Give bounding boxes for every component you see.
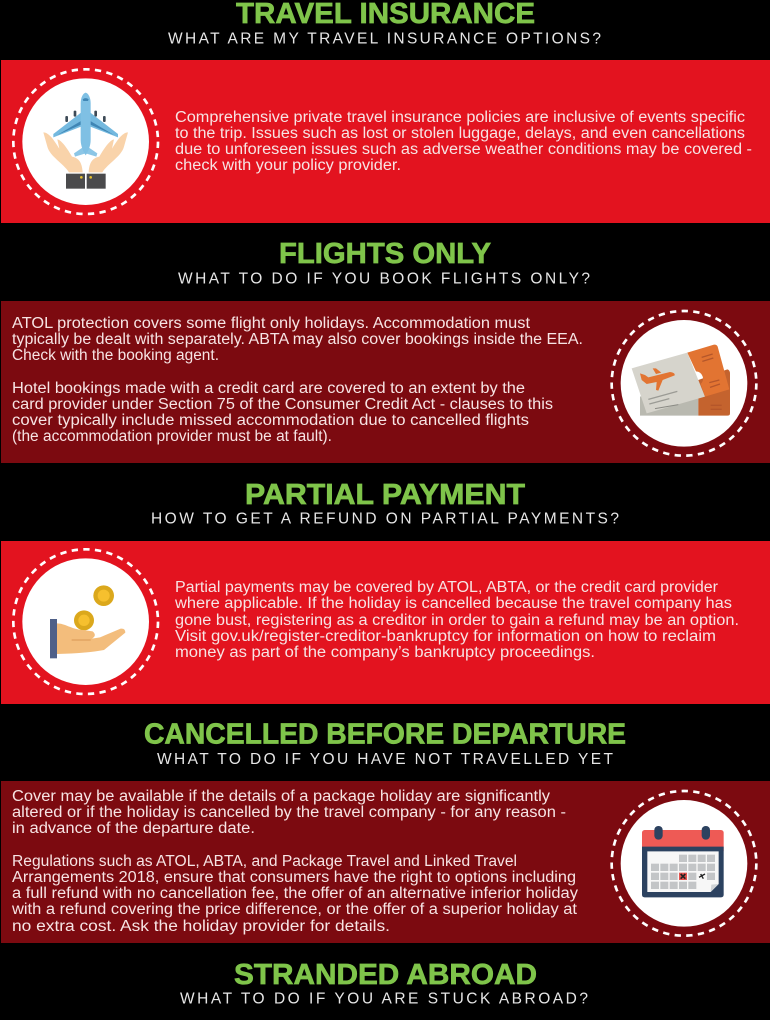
text: travel insurance body: to the trip. Issues such as lost or stolen luggage, delays, and even cancellations: [175, 125, 745, 142]
text: partial payment body: Partial payments may be covered by ATOL, ABTA, or the credit card provider: [175, 579, 718, 596]
text: cancelled before departure body: with a refund covering the price difference, or the offer of a superior holiday at: [11, 901, 578, 918]
text: cancelled before departure body: Cover may be available if the details of a package holiday are significantly: [12, 788, 550, 805]
text: cancelled before departure body: a full refund with no cancellation fee, the offer of an alternative inferior holiday: [12, 885, 578, 902]
text: flights only body: [12, 315, 583, 445]
text: partial payment body: gone bust, registering as a creditor in order to gain a refund may be an option.: [175, 612, 739, 629]
heading: flights only: [178, 238, 590, 288]
text: cancelled before departure body: in advance of the departure date.: [12, 820, 255, 837]
panel: partial payment: [1, 541, 770, 704]
text: travel insurance body: check with your policy provider.: [175, 157, 401, 174]
text: cancelled before departure body: altered or if the holiday is cancelled by the travel company - for any reason -: [12, 804, 566, 821]
panel: cancelled before departure: [1, 781, 770, 943]
heading: stranded abroad: WHAT TO DO IF YOU ARE STUCK ABROAD?: [180, 990, 588, 1008]
heading: partial payment: [151, 479, 619, 528]
text: flights only body: cover typically include missed accommodation due to cancelled flights: [12, 412, 529, 429]
text: cancelled before departure body: no extra cost. Ask the holiday provider for details.: [12, 918, 390, 935]
text: travel insurance body: [175, 109, 752, 174]
text: partial payment body: money as part of the company’s bankruptcy proceedings.: [175, 644, 595, 661]
heading: flights only: WHAT TO DO IF YOU BOOK FLIGHTS ONLY?: [178, 270, 590, 288]
heading: cancelled before departure: WHAT TO DO IF YOU HAVE NOT TRAVELLED YET: [157, 751, 614, 768]
text: partial payment body: [174, 579, 739, 661]
heading: travel insurance: WHAT ARE MY TRAVEL INSURANCE OPTIONS?: [168, 30, 601, 48]
text: partial payment body: where applicable. If the holiday is cancelled because the travel company has: [174, 595, 732, 612]
text: flights only body: ATOL protection covers some flight only holidays. Accommodation must: [12, 315, 531, 332]
panel: flights only: [1, 301, 770, 463]
icon: plane tickets: [612, 311, 756, 456]
text: flights only body: typically be dealt with separately. ABTA may also cover bookings inside the EEA.: [12, 331, 583, 348]
heading: stranded abroad: STRANDED ABROAD: [234, 959, 537, 991]
icon: plane held in hands: [13, 69, 158, 214]
text: flights only body: Hotel bookings made with a credit card are covered to an extent by the: [12, 380, 525, 397]
text: cancelled before departure body: [11, 788, 578, 935]
text: flights only body: card provider under Section 75 of the Consumer Credit Act - clauses to this: [12, 396, 553, 413]
heading: cancelled before departure: CANCELLED BEFORE DEPARTURE: [144, 718, 626, 750]
text: partial payment body: Visit gov.uk/register-creditor-bankruptcy for information on how to reclaim: [175, 628, 716, 645]
heading: cancelled before departure: [144, 718, 626, 768]
heading: travel insurance: [168, 0, 601, 48]
heading: partial payment: HOW TO GET A REFUND ON PARTIAL PAYMENTS?: [151, 510, 619, 528]
text: cancelled before departure body: Regulations such as ATOL, ABTA, and Package Travel and Linked Travel: [12, 853, 517, 870]
heading: flights only: FLIGHTS ONLY: [279, 238, 491, 270]
text: travel insurance body: due to unforeseen issues such as adverse weather conditions may be covered -: [175, 141, 752, 158]
panel: travel insurance: [1, 60, 770, 223]
text: flights only body: Check with the booking agent.: [12, 347, 219, 364]
icon: calendar: [612, 791, 756, 936]
text: travel insurance body: Comprehensive private travel insurance policies are inclusive of events specific: [175, 109, 745, 126]
heading: partial payment: PARTIAL PAYMENT: [245, 479, 525, 511]
text: flights only body: (the accommodation provider must be at fault).: [12, 428, 332, 445]
heading: stranded abroad: [180, 959, 588, 1008]
text: cancelled before departure body: Arrangements 2018, ensure that consumers have the right to options including: [12, 869, 576, 886]
icon: hand with coins: [13, 549, 158, 694]
